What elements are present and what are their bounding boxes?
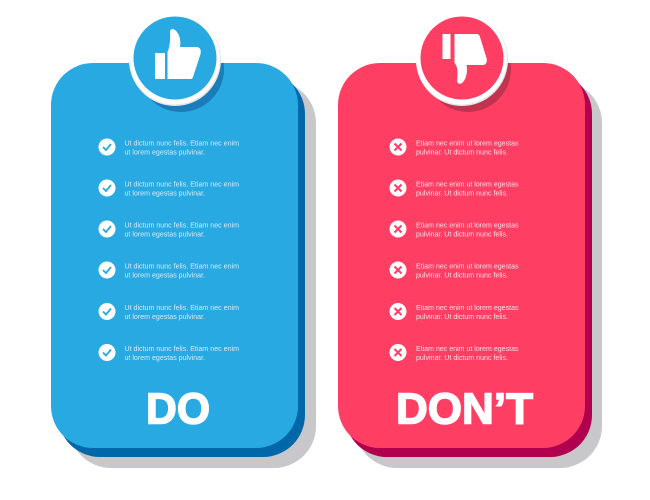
item 5: pulvinar. Ut dictum nunc felis. [416, 314, 508, 321]
item 6 [390, 344, 519, 362]
item 2 [390, 180, 519, 198]
item 4: ut lorem egestas pulvinar. [124, 272, 205, 280]
item 2: Ut dictum nunc felis. Etiam nec enim [124, 182, 239, 188]
item 1 [390, 138, 519, 156]
panel: do [51, 14, 316, 468]
item 6 [98, 344, 239, 362]
card shadow: don't [355, 81, 602, 468]
card body: don't [338, 63, 585, 448]
item 3: Etiam nec enim ut lorem egestas [416, 222, 519, 230]
item 2 [98, 180, 239, 198]
item 5 [98, 303, 239, 321]
item 1: Ut dictum nunc felis. Etiam nec enim [124, 140, 239, 148]
heading: do: DO [146, 384, 210, 434]
item 1: Etiam nec enim ut lorem egestas [416, 140, 519, 148]
item 2: ut lorem egestas pulvinar. [124, 190, 205, 198]
item 4: pulvinar. Ut dictum nunc felis. [416, 272, 508, 280]
icon: thumbs down [416, 14, 511, 112]
item 6: Etiam nec enim ut lorem egestas [416, 346, 519, 353]
heading: don't: DON’T [396, 384, 533, 434]
card body: do [51, 63, 298, 448]
panel: don't [338, 14, 602, 468]
item 1: pulvinar. Ut dictum nunc felis. [416, 150, 508, 156]
item 1 [98, 138, 239, 156]
item 3: Ut dictum nunc felis. Etiam nec enim [124, 222, 239, 230]
item 4 [390, 262, 519, 280]
item 6: pulvinar. Ut dictum nunc felis. [416, 355, 508, 362]
card depth: don't [345, 72, 592, 457]
item 2: pulvinar. Ut dictum nunc felis. [416, 190, 508, 198]
item 6: Ut dictum nunc felis. Etiam nec enim [124, 346, 239, 353]
item 3: pulvinar. Ut dictum nunc felis. [416, 232, 508, 238]
item 2: Etiam nec enim ut lorem egestas [416, 182, 519, 188]
item 4 [98, 262, 239, 280]
icon: thumbs up [129, 14, 224, 112]
list: do items [98, 138, 239, 362]
item 5: Etiam nec enim ut lorem egestas [416, 305, 519, 312]
item 5: Ut dictum nunc felis. Etiam nec enim [124, 305, 239, 312]
item 5: ut lorem egestas pulvinar. [124, 314, 205, 321]
item 4: Etiam nec enim ut lorem egestas [416, 264, 519, 270]
item 1: ut lorem egestas pulvinar. [124, 150, 205, 156]
item 3: ut lorem egestas pulvinar. [124, 232, 205, 238]
item 3 [390, 220, 519, 238]
item 4: Ut dictum nunc felis. Etiam nec enim [124, 264, 239, 270]
card shadow: do [69, 81, 316, 468]
card depth: do [58, 72, 305, 457]
list: don't items [390, 138, 519, 362]
item 3 [98, 220, 239, 238]
item 6: ut lorem egestas pulvinar. [124, 355, 205, 362]
item 5 [390, 303, 519, 321]
